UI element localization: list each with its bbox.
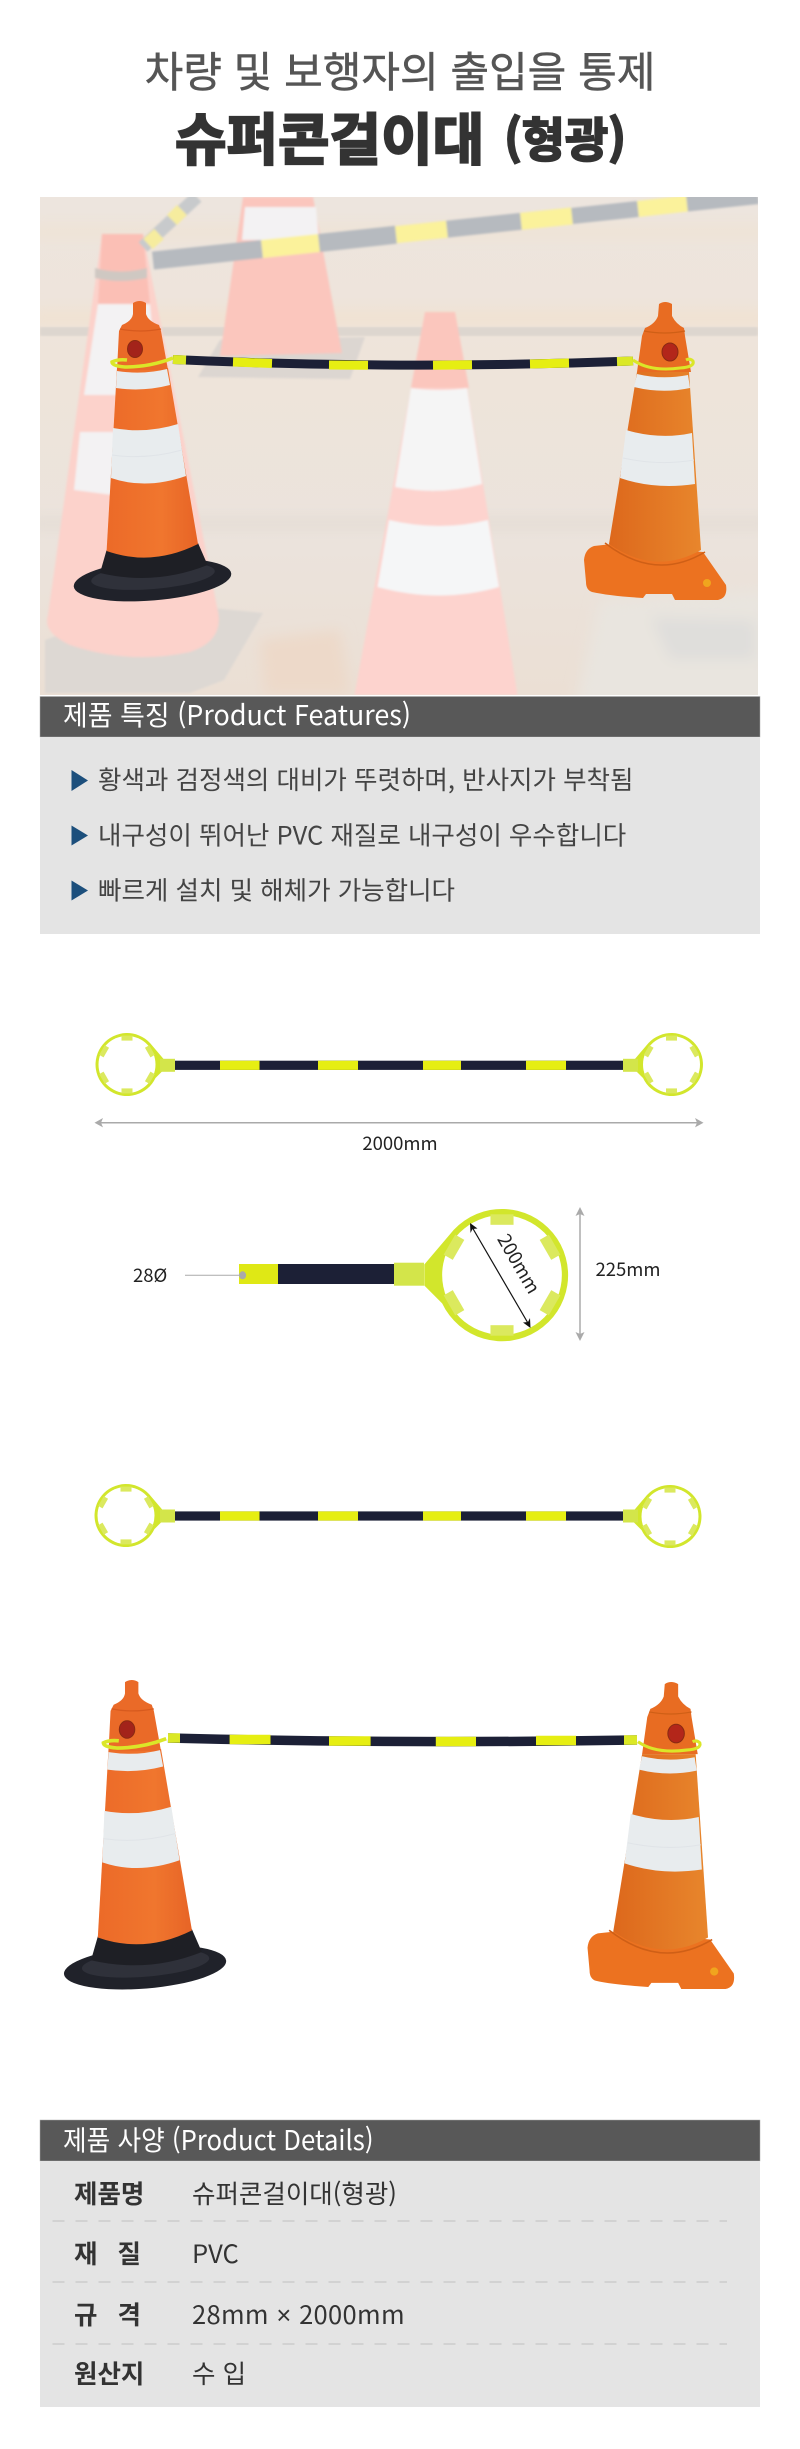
row: size [74,2295,405,2332]
dimension arrow: 225mm [576,1207,661,1341]
label: 28 diameter [133,1262,246,1288]
panel: features list [40,737,760,934]
feature 3: 빠르게 설치 및 해체가 가능합니다 [98,870,455,908]
left cone [62,1680,228,1995]
row: material [74,2234,239,2271]
heading: product features: 제품 특징 (Product Features) [63,693,411,733]
diagram: rod overview [95,1484,701,1548]
label: 28 diameter: 28Ø [133,1262,167,1288]
row: origin: 수 입 [192,2354,246,2391]
feature 2: 내구성이 뛰어난 PVC 재질로 내구성이 우수합니다 [98,816,626,852]
right cone [588,1682,734,1989]
row: size: 격 [118,2295,141,2332]
dimension arrow: 200mm [470,1223,547,1328]
label: 2000mm: 2000mm [362,1130,438,1156]
photo: left cone [72,301,233,607]
title: product name [175,96,626,177]
panel: hero photo [30,196,770,705]
heading: product details: 제품 사양 (Product Details) [63,2118,374,2158]
panel: specification table [40,2161,760,2407]
dimension arrow: 225mm: 225mm [596,1256,661,1282]
row: product name: 제품명 [74,2174,144,2211]
diagram: rod end detail [133,1207,661,1341]
product photo: cones with bar [62,1680,734,1995]
row: material: PVC [192,2234,239,2271]
row: product name: 슈퍼콘걸이대(형광) [192,2174,397,2211]
row: material: 재 [74,2234,97,2271]
title: product name: 슈퍼콘걸이대 [175,96,484,177]
diagram: full rod with length dimension [94,1033,704,1156]
photo: barrier bar [173,360,633,365]
row: material: 질 [118,2234,141,2271]
photo: right cone [584,302,726,600]
title: tagline: 차량 및 보행자의 출입을 통제 [145,39,655,100]
title: product name: (형광) [504,102,626,171]
feature 1: 황색과 검정색의 대비가 뚜렷하며, 반사지가 부착됨 [98,760,633,797]
dimension arrow: 200mm: 200mm [492,1229,547,1298]
heading: product details [40,2118,760,2161]
row: size: 규 [74,2295,97,2332]
row: origin [74,2354,246,2391]
row: product name [74,2174,397,2211]
row: origin: 원산지 [74,2354,144,2391]
heading: product features [40,693,760,737]
rod end [239,1209,568,1341]
row: size: 28mm × 2000mm [192,2295,405,2332]
barrier bar [168,1738,637,1742]
dimension arrow: 2000mm [94,1118,704,1127]
